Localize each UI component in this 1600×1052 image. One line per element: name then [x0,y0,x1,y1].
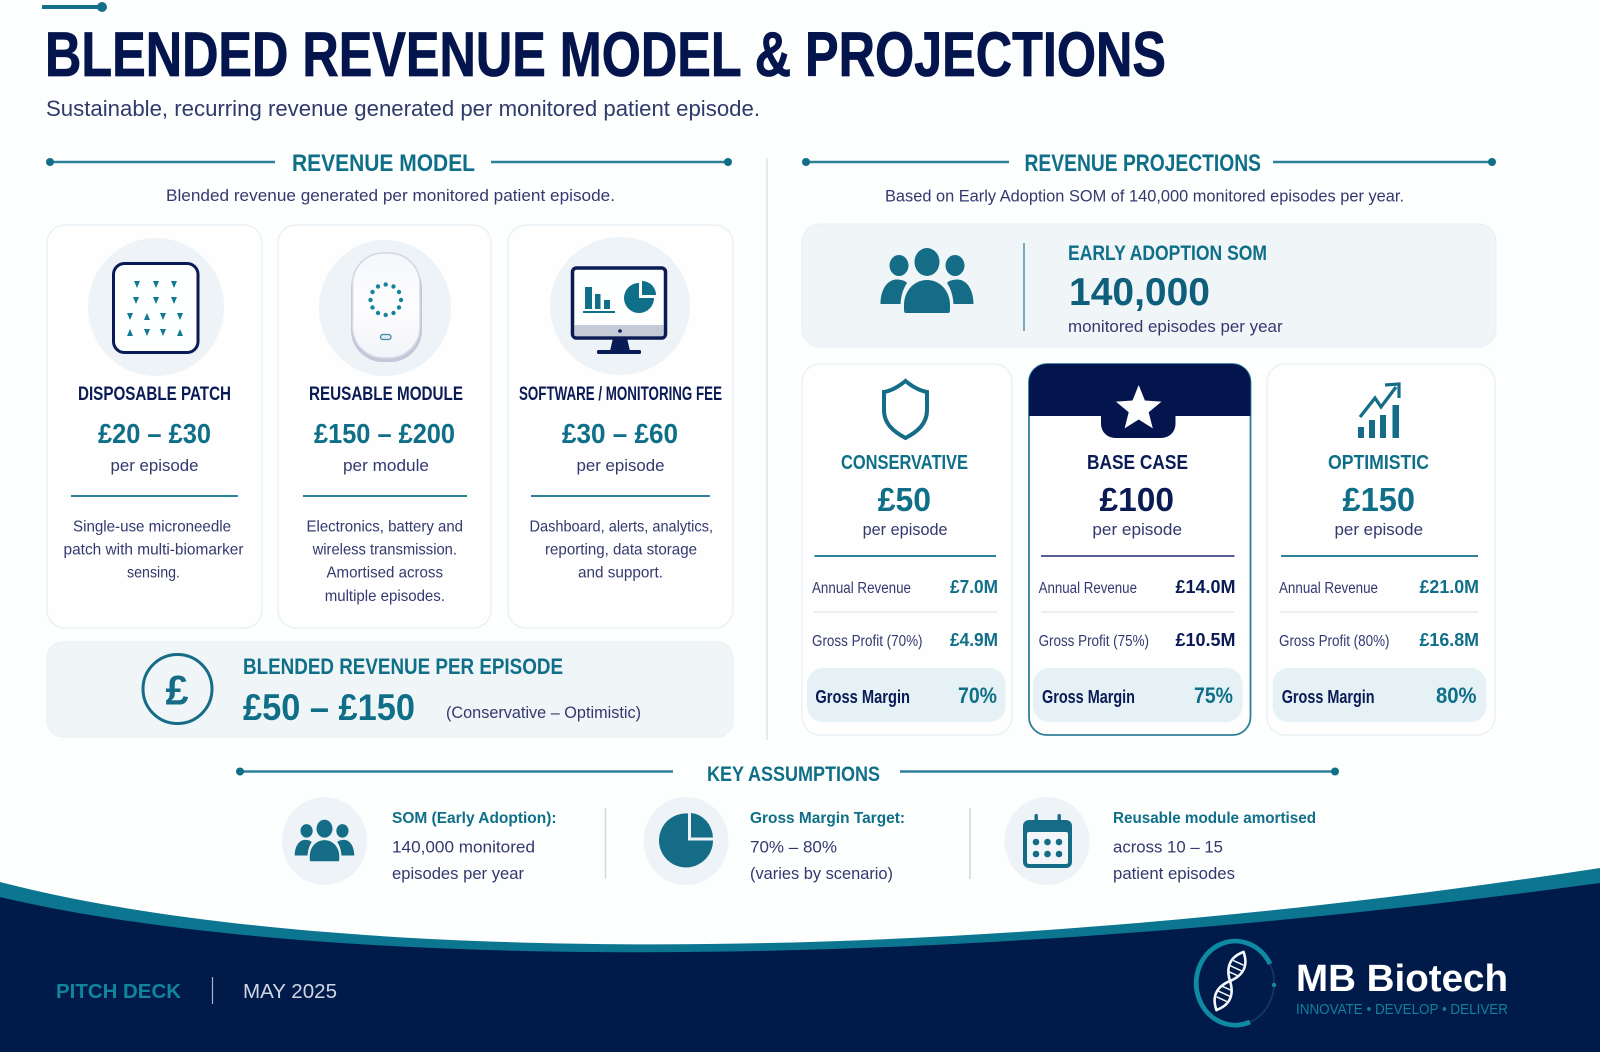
description: Amortised across [326,564,443,582]
gross margin row: Gross Margin [1042,686,1135,707]
icon: star [1116,385,1162,428]
assumption text [1113,810,1316,883]
icon: pound coin: £ [166,666,188,714]
blended range: £50 – £150 [243,687,415,728]
subtitle: Sustainable, recurring revenue generated per monitored patient episode. [46,96,760,121]
icon: growth chart [1358,384,1399,438]
assumption: SOM [282,797,556,885]
annual revenue row [1039,577,1236,597]
annual revenue row: £21.0M [1420,577,1479,597]
SOM label: EARLY ADOPTION SOM [1068,242,1267,265]
icon: pie chart [644,797,728,885]
section: revenue projections [802,150,1496,735]
card: disposable patch [47,225,262,628]
card title: SOFTWARE / MONITORING FEE [519,384,722,405]
description: multiple episodes. [325,588,445,605]
description [64,518,244,582]
gross margin row: 70% [958,683,997,708]
title: BLENDED REVENUE MODEL & PROJECTIONS [45,20,1166,90]
description [530,518,713,582]
card title: DISPOSABLE PATCH [78,384,231,405]
SOM value: 140,000 [1069,271,1210,314]
scenario name: BASE CASE [1087,452,1188,474]
section: revenue model [46,150,733,737]
heading: revenue projections [802,150,1496,177]
heading: key assumptions: KEY ASSUMPTIONS [707,763,880,786]
assumption: reusable module [1004,797,1316,885]
unit: per episode [863,520,948,539]
annual revenue row: Annual Revenue [812,580,911,597]
panel: early adoption SOM [802,224,1496,347]
footer curve [0,868,1600,1052]
gross margin row [807,668,1006,722]
card: base case scenario [1029,364,1250,735]
description: reporting, data storage [545,542,697,558]
gross profit row: £4.9M [950,630,998,650]
icon: reusable module device [319,240,451,376]
scenario name: CONSERVATIVE [841,452,968,474]
gross profit row [1279,630,1479,650]
icon: people [282,797,367,885]
assumption text: (varies by scenario) [750,864,893,883]
annual revenue row [1279,577,1479,597]
header band with star badge [1029,364,1250,438]
assumption text [392,810,556,883]
annual revenue row: £14.0M [1176,577,1236,597]
unit: per episode [110,456,198,475]
assumption: gross margin [644,797,905,885]
assumption text: 140,000 monitored [392,838,535,856]
description: Electronics, battery and [306,518,463,536]
gross margin row [1033,668,1242,722]
range note: (Conservative – Optimistic) [446,703,641,722]
panel: blended revenue per episode [47,642,733,737]
price: £150 – £200 [314,418,455,449]
heading: key assumptions [236,763,1339,786]
gross margin row [1273,668,1486,722]
panel heading: BLENDED REVENUE PER EPISODE [243,654,563,679]
card: optimistic scenario [1267,364,1495,735]
pitch deck label: PITCH DECK [56,981,182,1003]
annual revenue row [812,577,998,597]
icon: people [880,248,974,313]
unit: per module [343,456,429,475]
gross profit row: £16.8M [1420,630,1479,650]
company name: MB Biotech [1296,958,1508,1000]
assumption text: 70% – 80% [750,838,837,856]
footer [0,868,1600,1052]
gross profit row [812,630,998,650]
heading: revenue model: REVENUE MODEL [292,150,475,177]
assumption text: SOM (Early Adoption): [392,810,556,827]
description: sensing. [127,564,180,582]
annual revenue row: Annual Revenue [1039,580,1137,597]
gross margin row: 75% [1194,683,1233,708]
projections description: Based on Early Adoption SOM of 140,000 monitored episodes per year. [885,186,1404,206]
section: key assumptions [236,763,1339,885]
card: reusable module [278,225,491,628]
gross margin row: 80% [1436,683,1477,708]
annual revenue row: Annual Revenue [1279,580,1378,597]
heading: revenue projections: REVENUE PROJECTIONS [1024,150,1261,177]
date: MAY 2025 [243,981,337,1003]
annual revenue row: £7.0M [950,577,998,597]
gross profit row: Gross Profit (70%) [812,633,922,650]
accent bar [42,2,107,12]
gross profit row: Gross Profit (75%) [1039,633,1149,650]
assumption text: patient episodes [1113,864,1235,883]
gross profit row: £10.5M [1176,630,1236,650]
gross margin row: Gross Margin [1282,686,1375,707]
description: wireless transmission. [312,542,457,558]
card: conservative scenario [802,364,1012,735]
unit: per episode [1334,520,1423,539]
gross profit row: Gross Profit (80%) [1279,633,1390,650]
card title: REUSABLE MODULE [309,384,463,405]
assumption text [750,810,905,883]
icon: calendar [1004,797,1090,885]
assumption text: across 10 – 15 [1113,838,1223,856]
price: £30 – £60 [562,418,678,449]
card: software monitoring fee [508,225,733,628]
gross profit row [1039,630,1236,650]
assumption text: Reusable module amortised [1113,810,1316,827]
tagline: INNOVATE • DEVELOP • DELIVER [1296,1002,1508,1018]
logo: MB Biotech [1196,941,1508,1025]
scenario price: £150 [1342,481,1415,518]
icon: microneedle patch [88,238,224,376]
SOM unit: monitored episodes per year [1068,317,1283,336]
description: Dashboard, alerts, analytics, [530,518,713,536]
gross margin row: Gross Margin [815,686,910,707]
unit: per episode [576,456,664,475]
price: £20 – £30 [98,418,211,449]
icon: shield [884,381,927,438]
description: and support. [578,564,663,582]
assumption text: episodes per year [392,864,524,883]
revenue model description: Blended revenue generated per monitored patient episode. [166,186,615,205]
icon: dashboard monitor [550,237,690,375]
description: patch with multi-biomarker [64,542,244,558]
unit: per episode [1092,520,1182,539]
description: Single-use microneedle [73,518,231,536]
icon: DNA helix ring [1196,941,1276,1025]
scenario price: £100 [1100,481,1174,518]
scenario name: OPTIMISTIC [1328,452,1429,474]
scenario price: £50 [878,481,931,518]
assumption text: Gross Margin Target: [750,810,905,827]
icon: pound coin [143,654,212,724]
heading: revenue model [46,150,732,177]
description [306,518,463,605]
